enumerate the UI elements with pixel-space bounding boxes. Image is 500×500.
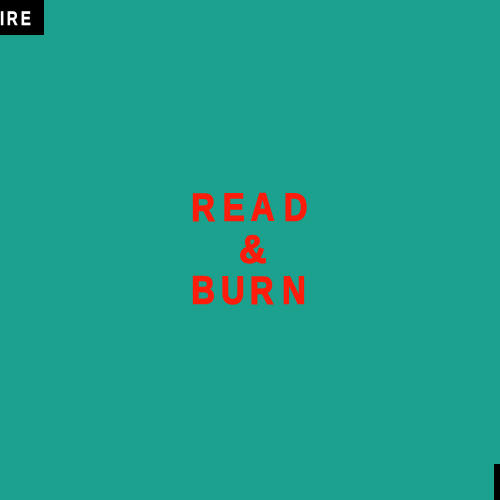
tag text: IRE (0, 7, 31, 29)
title line: BURN: BURN (191, 269, 306, 312)
top-left black tag (0, 0, 44, 35)
title: read and burn (191, 186, 308, 312)
title ampersand: & (239, 229, 266, 272)
bottom-right black tag (494, 464, 500, 500)
title line: READ: READ (191, 186, 308, 229)
